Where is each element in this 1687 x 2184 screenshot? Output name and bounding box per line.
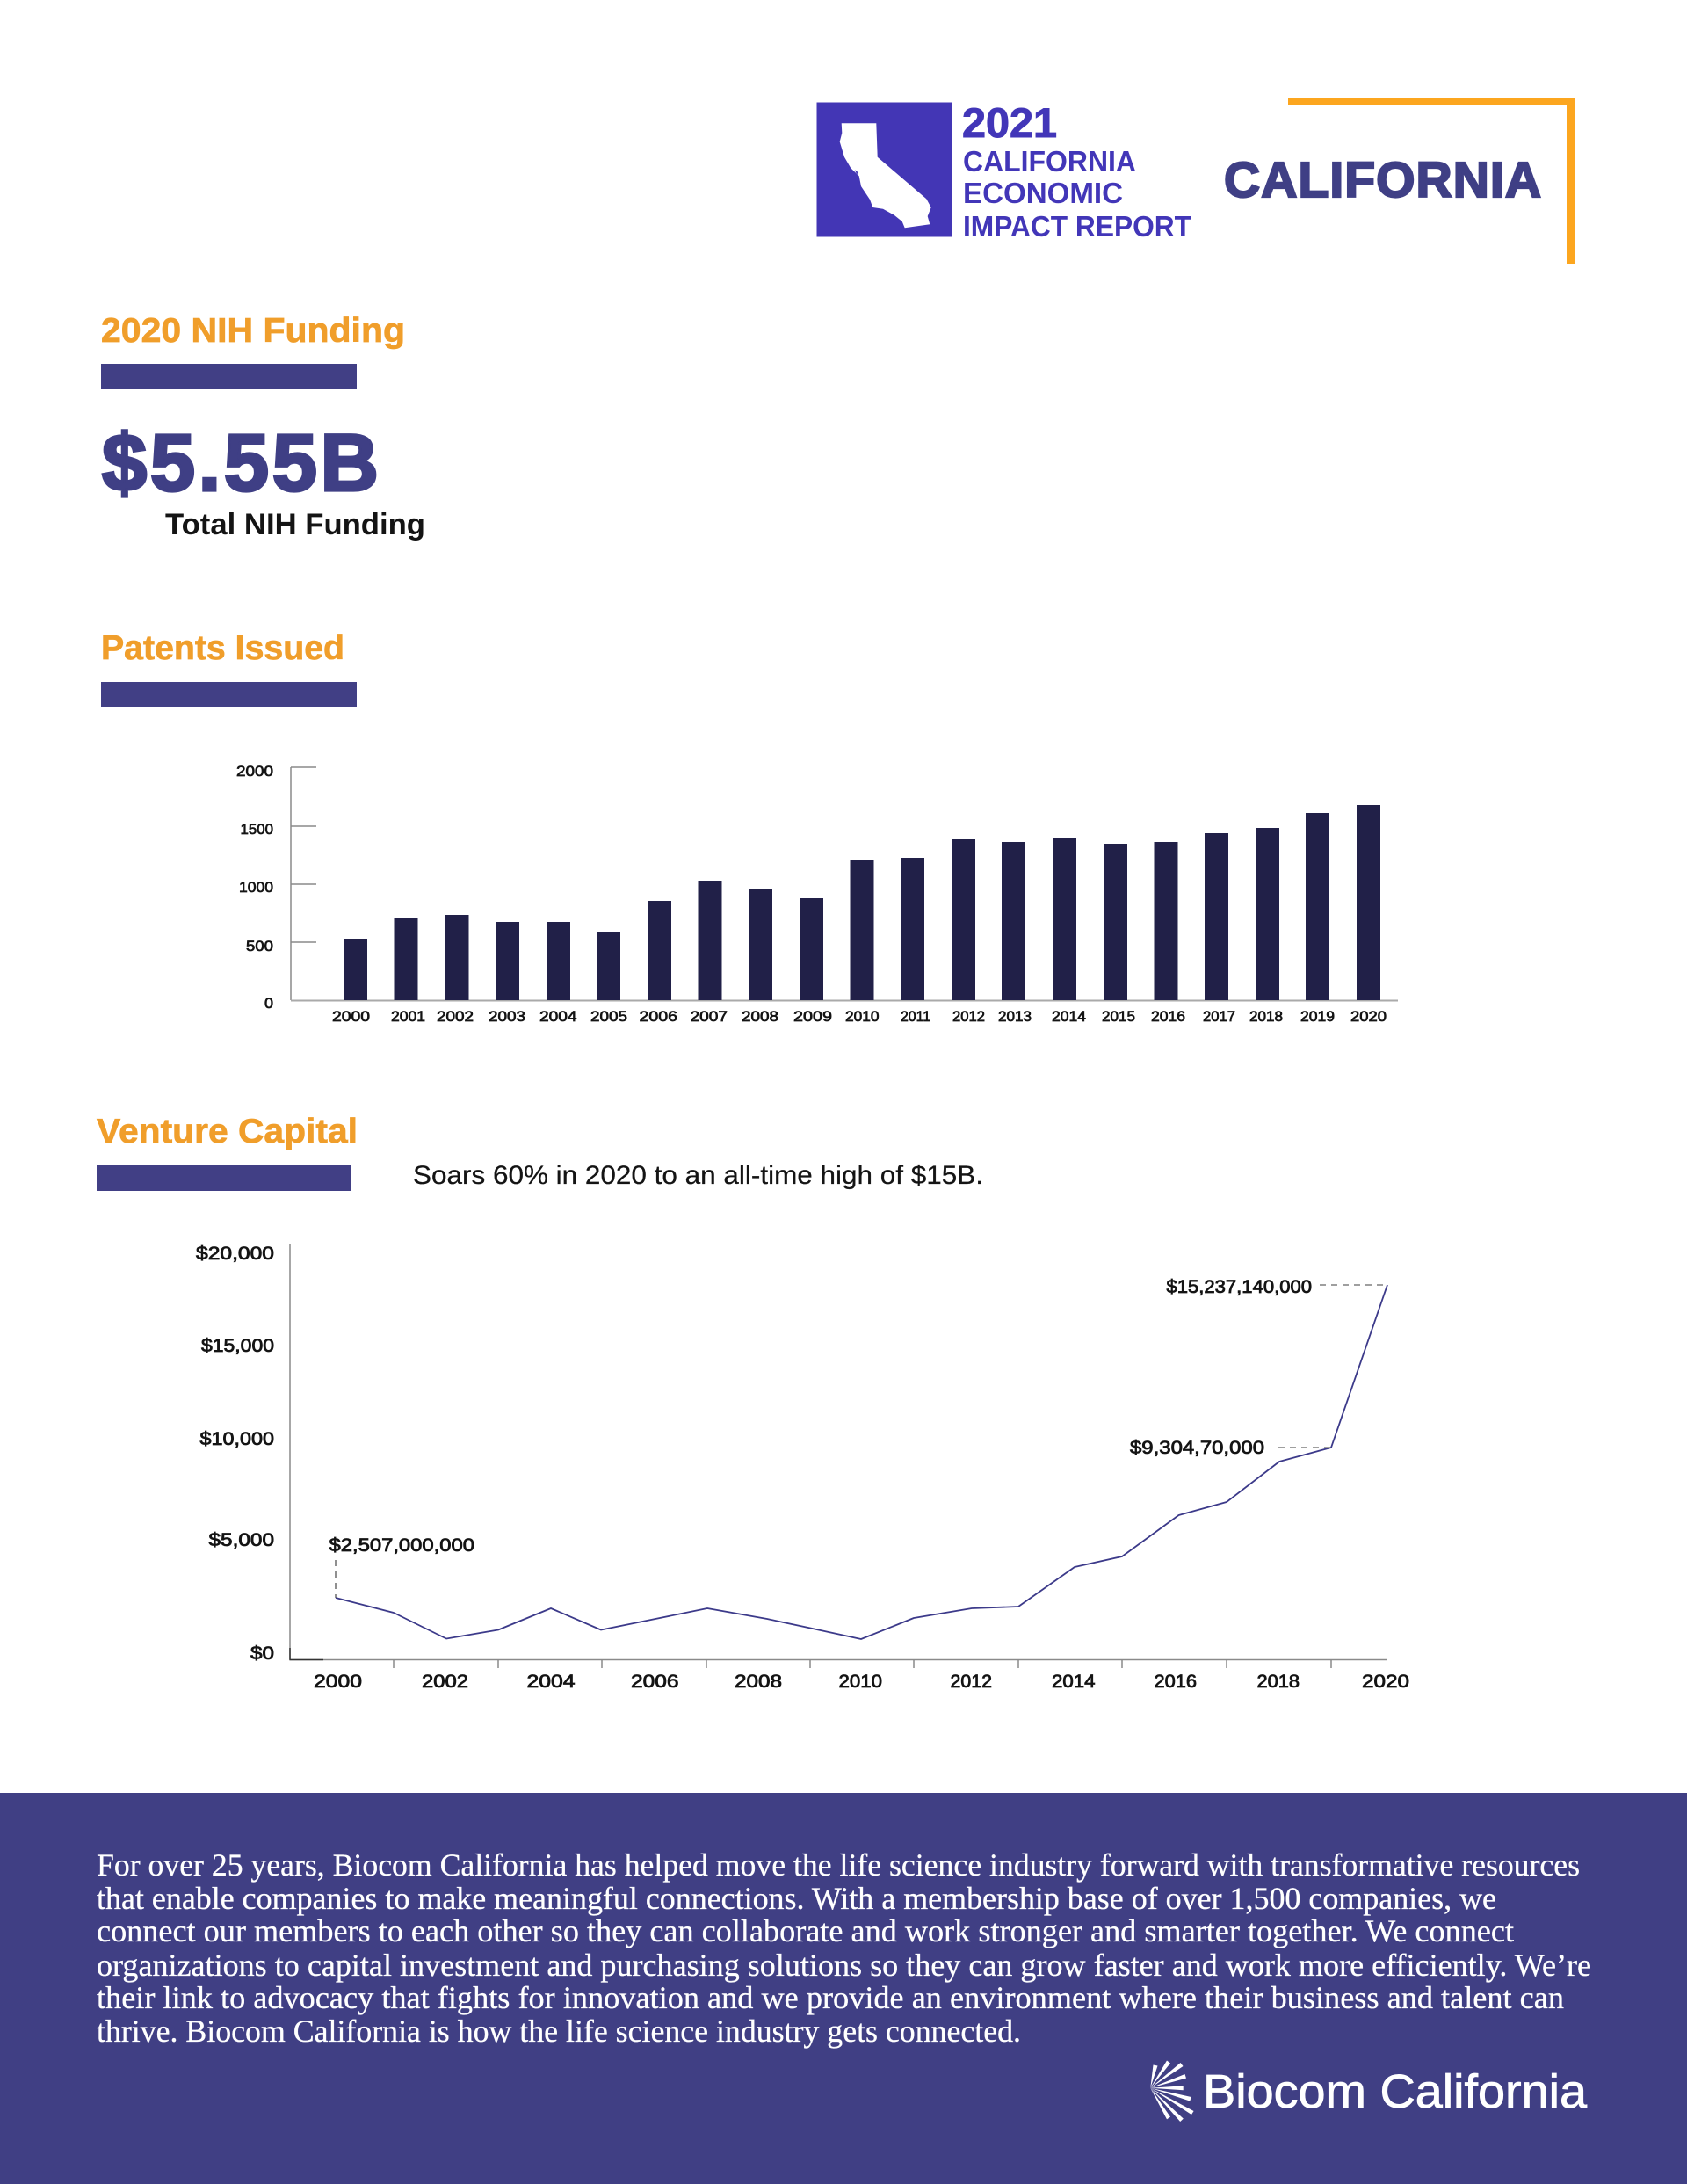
x axis labels: 2002 (422, 1672, 468, 1692)
y axis labels: $10,000 (200, 1429, 274, 1449)
x axis labels: 2012 (952, 1008, 985, 1025)
x axis labels: 2008 (742, 1008, 778, 1025)
y axis labels: 1000 (239, 879, 273, 896)
y axis labels: 500 (246, 938, 273, 954)
x axis labels: 2020 (1362, 1672, 1409, 1692)
x axis labels: 2004 (527, 1672, 576, 1692)
x axis labels: 2003 (489, 1008, 525, 1025)
heading bar (97, 1165, 351, 1191)
logo text (962, 99, 1191, 243)
heading bar (101, 364, 357, 389)
logo text: IMPACT REPORT (963, 210, 1191, 243)
callout: 2000 value: $2,507,000,000 (329, 1535, 474, 1556)
footer paragraph: that enable companies to make meaningful connections. With a membership base of over 1,500 companies, we (97, 1881, 1496, 1916)
x axis labels: 2016 (1151, 1008, 1185, 1025)
axes and ticks (290, 1244, 1387, 1668)
x axis labels: 2010 (845, 1008, 879, 1025)
x axis labels: 2020 (1350, 1008, 1387, 1025)
logo square with California map (817, 102, 952, 237)
state title: CALIFORNIA (1224, 152, 1541, 208)
y axis labels: 0 (264, 995, 273, 1012)
line chart (196, 1244, 1409, 1692)
y axis labels: 2000 (236, 763, 273, 780)
x axis labels: 2013 (998, 1008, 1032, 1025)
x axis labels (314, 1672, 1409, 1692)
x axis labels: 2014 (1052, 1008, 1086, 1025)
panel: NIH funding (101, 312, 425, 541)
footer paragraph: thrive. Biocom California is how the life science industry gets connected. (97, 2013, 1021, 2049)
footer paragraph (97, 1847, 1591, 2049)
x axis labels: 2012 (951, 1672, 992, 1692)
x axis labels: 2005 (590, 1008, 627, 1025)
callout: 2020 value: $15,237,140,000 (1167, 1277, 1312, 1297)
x axis labels: 2018 (1256, 1672, 1300, 1692)
x axis labels: 2007 (691, 1008, 728, 1025)
y axis labels: $5,000 (209, 1530, 274, 1550)
summary text: Soars 60% in 2020 to an all-time high of $15B. (413, 1161, 983, 1190)
x axis labels: 2000 (332, 1008, 370, 1025)
logo text: 2021 (962, 99, 1057, 146)
x axis labels: 2019 (1300, 1008, 1335, 1025)
caption: Total NIH Funding (165, 508, 425, 541)
data line (336, 1285, 1387, 1639)
x axis labels: 2016 (1155, 1672, 1197, 1692)
x axis labels (332, 1008, 1387, 1025)
report logo (817, 99, 1191, 243)
y axis labels: $0 (250, 1643, 274, 1664)
x axis labels: 2002 (437, 1008, 474, 1025)
panel: footer (0, 1793, 1687, 2184)
x axis labels: 2004 (539, 1008, 576, 1025)
orange corner bracket (1288, 98, 1575, 264)
logo text: CALIFORNIA (963, 145, 1136, 178)
y axis labels: 1500 (241, 821, 273, 838)
heading: Venture Capital: Venture Capital (97, 1113, 358, 1150)
big number: $5.55B (102, 418, 379, 508)
x axis labels: 2015 (1102, 1008, 1135, 1025)
x axis labels: 2009 (793, 1008, 832, 1025)
y axis labels (196, 1244, 274, 1664)
wordmark: Biocom California (1203, 2065, 1588, 2118)
heading bar (101, 682, 357, 707)
y axis labels: $20,000 (196, 1244, 274, 1264)
y axis labels: $15,000 (201, 1336, 274, 1356)
footer paragraph: For over 25 years, Biocom California has helped move the life science industry forward with transformative resources (97, 1847, 1580, 1883)
x axis labels: 2018 (1249, 1008, 1283, 1025)
y axis labels (236, 763, 273, 1012)
x axis labels: 2001 (391, 1008, 425, 1025)
footer paragraph: organizations to capital investment and purchasing solutions so they can grow faster and work more efficiently. We’re (97, 1948, 1591, 1983)
footer paragraph: connect our members to each other so they can collaborate and work stronger and smarter together. We connect (97, 1913, 1514, 1948)
x axis labels: 2014 (1052, 1672, 1096, 1692)
bars (344, 805, 1380, 1000)
panel: venture capital (97, 1113, 1409, 1692)
heading: Patents Issued: Patents Issued (101, 629, 344, 667)
Biocom California logo (1150, 2060, 1588, 2122)
panel: patents issued (101, 629, 1398, 1025)
callout: 2019 value: $9,304,70,000 (1130, 1438, 1264, 1458)
bar chart (236, 763, 1398, 1025)
x axis labels: 2006 (631, 1672, 678, 1692)
y axis and ticks (291, 767, 1398, 1000)
heading: 2020 NIH Funding: 2020 NIH Funding (101, 312, 405, 350)
x axis labels: 2017 (1203, 1008, 1235, 1025)
icon: radiating burst (1150, 2060, 1194, 2122)
x axis labels: 2011 (901, 1008, 930, 1025)
logo text: ECONOMIC (963, 177, 1123, 209)
x axis labels: 2008 (735, 1672, 782, 1692)
x axis labels: 2010 (838, 1672, 882, 1692)
x axis labels: 2000 (314, 1672, 362, 1692)
x axis labels: 2006 (640, 1008, 677, 1025)
footer paragraph: their link to advocacy that fights for innovation and we provide an environment where their business and talent can (97, 1980, 1564, 2015)
